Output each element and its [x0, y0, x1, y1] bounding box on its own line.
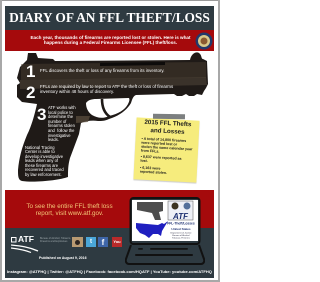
step 3	[37, 105, 76, 142]
intro text	[30, 34, 191, 45]
intro text: happens during a Federal Firearms Licensee (FFL) theft/loss.	[44, 40, 177, 45]
note statistic: stolen	[140, 166, 167, 175]
icon: Facebook	[98, 237, 108, 247]
report: handgun photo	[137, 202, 163, 220]
title: DIARY OF AN FFL THEFT/LOSS	[9, 10, 210, 25]
step 2 text: inventory within 48 hours of discovery.	[40, 89, 114, 94]
note statistic: total: were reported lost or	[141, 140, 177, 146]
laptop graphic	[125, 197, 205, 265]
trigger guard opening	[86, 98, 129, 118]
report: title text: FFL-Theft/Losses	[167, 222, 195, 226]
icon: ATF seal	[196, 32, 212, 50]
National Tracing Center text: recovered and traced	[25, 167, 64, 172]
title	[5, 6, 214, 30]
note heading	[144, 118, 192, 135]
number 1: 1	[26, 62, 35, 80]
note heading: and Losses	[150, 127, 185, 135]
agency tagline: Firearms and Explosives	[40, 240, 67, 243]
icon: Instagram	[72, 237, 83, 247]
call to action text: To see the entire FFL theft loss	[26, 202, 113, 210]
note statistic: total: from FFLs.	[141, 148, 160, 153]
ATF logo	[11, 234, 38, 253]
step 3 text: ATF works with	[48, 105, 76, 110]
step 2 text	[40, 84, 174, 94]
note statistic: total: stolen the same calendar year	[141, 144, 193, 151]
icon: Facebook: f	[102, 238, 104, 247]
report: title text: United States	[171, 227, 191, 231]
step 3 text: local police to	[48, 110, 73, 115]
ATF wordmark: ATF	[18, 234, 34, 244]
National Tracing Center text: by law enforcement.	[25, 172, 62, 176]
icon: Twitter: t	[90, 239, 92, 245]
step 2 text: FFLs are required by law to report to ATF the theft or loss of firearms	[40, 84, 173, 88]
step 3 text: determine the	[48, 114, 73, 119]
note statistic: lost: • 8,637 were reported as	[141, 155, 182, 161]
National Tracing Center text: these firearms are	[25, 162, 58, 168]
National Tracing Center text: develop investigative	[25, 154, 63, 158]
publication date: Published on August 9, 2016	[39, 256, 87, 260]
sticky note: 2015 FFL thefts and losses	[133, 117, 200, 183]
note statistic: lost	[140, 155, 182, 163]
report: ATF emblem card: ATF	[172, 212, 189, 221]
note statistic: stolen: reported stolen.	[140, 170, 167, 175]
note statistic: total	[141, 136, 193, 153]
call to action text: report, visit www.atf.gov.	[36, 210, 103, 217]
report: title text: Bureau of Alcohol	[172, 234, 190, 237]
National Tracing Center text: National Tracing	[25, 144, 55, 150]
note statistic: stolen: • 6,163 were	[140, 166, 161, 171]
note tape	[153, 114, 185, 119]
intro text: Each year, thousands of firearms are reported lost or stolen. Here is what	[30, 34, 191, 40]
step 3 text	[48, 105, 76, 142]
agency tagline: Bureau of Alcohol, Tobacco,	[40, 237, 71, 240]
note statistic: lost: lost.	[140, 159, 148, 163]
icon: YouTube: You	[113, 239, 121, 244]
number 3: 3	[37, 105, 46, 124]
laptop body	[126, 198, 204, 264]
report: title text	[167, 222, 195, 240]
footer	[5, 228, 214, 278]
icon: Twitter	[86, 237, 96, 247]
report: map of United States	[136, 221, 168, 238]
National Tracing Center text: leads when any of	[25, 158, 58, 163]
step 1	[26, 62, 164, 80]
icon: YouTube	[112, 237, 122, 247]
agency tagline	[40, 237, 71, 243]
step 1 text: FFL discovers the theft or loss of any firearms from its inventory.	[40, 68, 164, 72]
social media handles: Instagram: @ATFHQ | Twitter: @ATFHQ | Facebook: facebook.com/HQATF | YouTube: youtube.com/ATFHQ	[7, 269, 212, 274]
note heading: 2015 FFL Thefts	[144, 118, 192, 128]
report: title text: Department of Justice	[170, 232, 192, 234]
National Tracing Center text	[25, 144, 64, 177]
step 3 text: and follow the	[48, 128, 74, 133]
step 3 text: leads.	[48, 137, 59, 142]
step 2	[26, 83, 174, 102]
call to action text	[26, 202, 113, 217]
report: title text: Tobacco, Firearms	[172, 238, 191, 240]
handgun illustration	[17, 52, 208, 182]
note statistic: total: • A total of 14,800 firearms	[141, 136, 186, 143]
step 3 text: number of	[48, 119, 66, 124]
intro banner	[5, 30, 214, 51]
number 2: 2	[26, 83, 35, 102]
National Tracing Center text: Center is able to	[25, 149, 55, 154]
step 3 text: investigative	[48, 133, 71, 138]
step 3 text: firearms stolen	[48, 123, 75, 128]
call to action banner	[5, 190, 214, 228]
